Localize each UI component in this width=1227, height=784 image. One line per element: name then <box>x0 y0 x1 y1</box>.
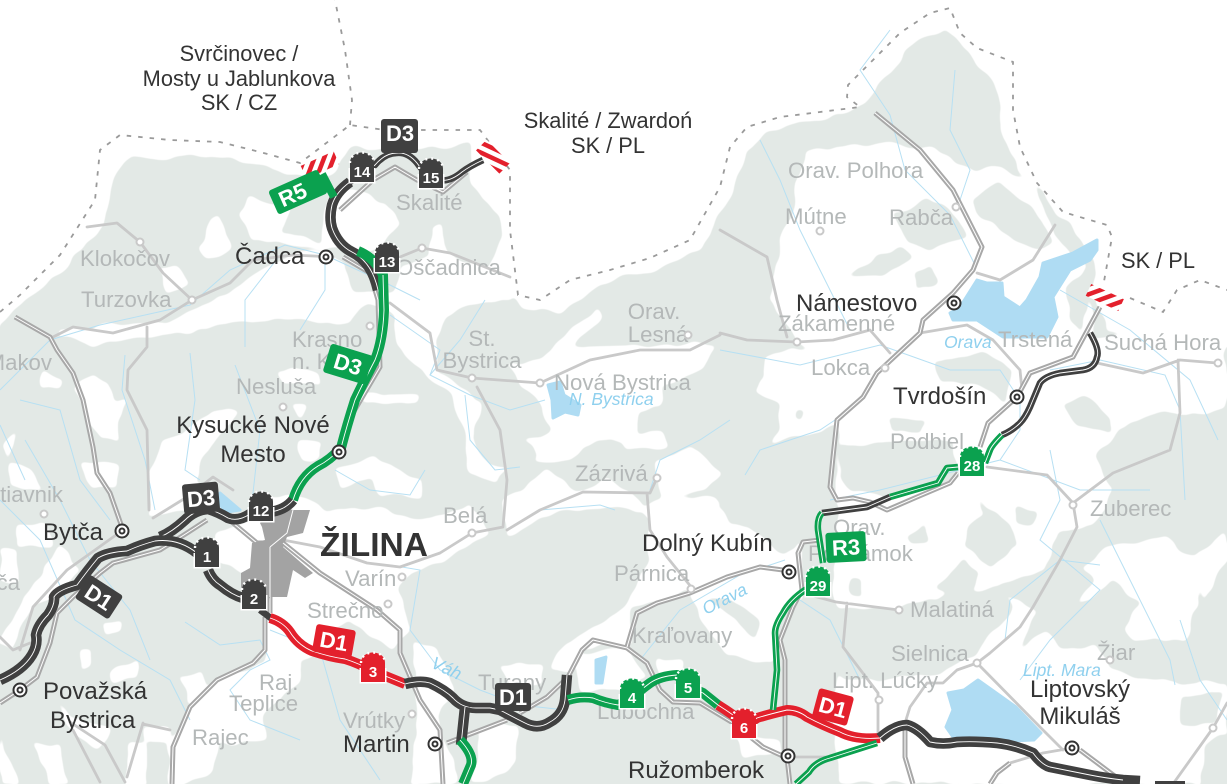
Čadca: Čadca <box>235 242 305 270</box>
Dolný Kubín: Dolný Kubín <box>642 530 773 557</box>
Kraľovany: Kraľovany <box>632 623 733 648</box>
tunnel icon 28: 28 <box>964 458 980 475</box>
Párnica: Párnica <box>614 561 690 586</box>
place names: light <box>0 158 1222 750</box>
Lipt. Mara: Lipt. Mara <box>1023 660 1101 680</box>
water names <box>428 332 1101 684</box>
city marker: Námestovo <box>948 296 960 310</box>
city area: Žilina <box>241 510 313 607</box>
Ružomberok: Ružomberok <box>628 757 765 784</box>
expressway R3 <box>773 333 1098 710</box>
road badge D3 north: D3 <box>386 121 414 146</box>
road badge D3 north <box>381 119 418 153</box>
city marker: Tvrdošín <box>1010 390 1024 404</box>
Orav. Podzámok second line: Podzámok <box>808 541 914 566</box>
St. Bystrica second line: Bystrica <box>443 348 522 373</box>
Sielnica: Sielnica <box>891 641 969 666</box>
Martin: Martin <box>343 731 410 758</box>
border crossing captions <box>143 41 1195 273</box>
road badge D3 green <box>323 343 373 385</box>
Orava river: Orava <box>699 579 751 619</box>
Nová Bystrica: Nová Bystrica <box>554 370 692 395</box>
Skalité: Skalité <box>396 190 463 215</box>
Ľubochna: Ľubochna <box>597 699 695 724</box>
tunnel icon 14: 14 <box>354 164 371 181</box>
road badge D1 Turany <box>495 683 531 711</box>
tunnel icon 1 <box>194 538 220 568</box>
motorway D1 under construction, red <box>270 618 405 684</box>
Svrčinovec: Svrčinovec / <box>180 41 299 66</box>
Mikuláš: Mikuláš <box>1039 703 1121 730</box>
Kysucké Nové Mesto: Kysucké Nové <box>176 412 330 439</box>
Liptovský Mikuláš: Liptovský <box>1030 676 1130 703</box>
motorway D1 tunnels section, green <box>568 675 718 705</box>
road badge R3 <box>825 531 867 563</box>
tunnel icon 14 <box>348 152 376 184</box>
Oščadnica: Oščadnica <box>396 255 501 280</box>
Mosty u Jablunkova: Mosty u Jablunkova <box>143 66 336 91</box>
border crossing sign Trstená <box>1086 284 1124 311</box>
tunnel icon 3 <box>360 652 386 684</box>
Tvrdošín: Tvrdošín <box>893 383 986 410</box>
Nesluša: Nesluša <box>236 374 317 399</box>
road badge R5 <box>268 169 328 215</box>
road badge D1 west <box>75 574 123 620</box>
tunnel icon 15 <box>418 158 444 190</box>
Bystrica: Bystrica <box>50 707 136 734</box>
Mútne: Mútne <box>785 204 847 229</box>
Námestovo: Námestovo <box>796 290 917 317</box>
Turzovka: Turzovka <box>81 287 172 312</box>
Žiar: Žiar <box>1097 640 1136 665</box>
Orav. Lesná second line: Lesná <box>628 322 689 347</box>
road badge R3: R3 <box>831 534 861 561</box>
tunnel icon 29: 29 <box>810 578 826 595</box>
SK / PL east: SK / PL <box>1121 248 1195 273</box>
Orava reservoir <box>950 240 1097 337</box>
north-west white patches <box>60 250 370 345</box>
state border <box>0 0 1227 312</box>
road badge D3 west: D3 <box>186 485 216 512</box>
tunnel icon 3: 3 <box>369 664 377 681</box>
Mesto: Mesto <box>220 441 286 468</box>
tunnel icon 2: 2 <box>250 591 258 608</box>
Liptovská Mara <box>946 680 1041 742</box>
tunnel icon 4 <box>618 678 646 710</box>
Zákamenné: Zákamenné <box>778 311 895 336</box>
Krasno second line: n. Kys. <box>292 349 360 374</box>
town labels <box>43 242 1130 784</box>
northern white area <box>770 142 1095 350</box>
motorway D3 to Hričov, dark <box>160 500 293 537</box>
St. Bystrica: St. <box>468 326 496 351</box>
tunnel icon 6: 6 <box>740 720 748 737</box>
Turany: Turany <box>478 670 547 695</box>
Rabča: Rabča <box>889 205 954 230</box>
Krpeľany lake <box>596 657 606 683</box>
Hričov lake <box>218 493 240 512</box>
road badge D1 west: D1 <box>80 579 117 616</box>
motorway D3 north, dark <box>330 153 483 290</box>
Klokočov: Klokočov <box>80 246 171 271</box>
tunnel icon 5: 5 <box>684 680 692 697</box>
Váh: Váh <box>428 652 465 684</box>
Skalité / Zwardoń: Skalité / Zwardoń <box>524 108 692 133</box>
road badge D1 red Strečno: D1 <box>318 627 350 656</box>
motorway D1 Martin, dark <box>405 675 567 745</box>
road badge D1 red Strečno <box>312 624 356 658</box>
SK / CZ: SK / CZ <box>201 90 277 115</box>
R-road south of Martin, green <box>460 740 472 784</box>
Podbiel: Podbiel <box>890 429 964 454</box>
Trstená: Trstená <box>998 327 1073 352</box>
Krasno n. Kys.: Krasno <box>292 327 362 352</box>
Malatiná: Malatiná <box>910 597 995 622</box>
Nová Bystrica reservoir <box>548 382 580 418</box>
eastern white area with grey patches <box>835 335 1227 784</box>
tunnel icon 5 <box>674 668 702 700</box>
SK / PL: SK / PL <box>571 133 645 158</box>
border crossing sign Skalité <box>476 140 510 174</box>
Lipt. Lúčky: Lipt. Lúčky <box>832 668 939 693</box>
Orav. Lesná: Orav. <box>628 299 680 324</box>
Orava: Orava <box>944 332 992 352</box>
tunnel icon 15: 15 <box>423 170 439 187</box>
central white patches <box>350 290 510 480</box>
Zuberec: Zuberec <box>1090 496 1171 521</box>
Bytča: Bytča <box>43 519 104 546</box>
tunnel icon 4: 4 <box>628 690 637 707</box>
city marker: Považská Bystrica <box>14 684 26 696</box>
motorway D1 Ružomberok, red <box>718 705 880 738</box>
tunnel icon 2 <box>240 580 268 610</box>
Žilina label: ŽILINA <box>320 526 428 564</box>
Vrútky: Vrútky <box>343 708 406 733</box>
Strečno: Strečno <box>307 598 383 623</box>
tunnel icon 28 <box>958 446 986 478</box>
Orav. Polhora: Orav. Polhora <box>788 158 924 183</box>
west white patches <box>73 373 128 440</box>
motorway D1 west, dark <box>0 540 272 680</box>
city marker: Liptovský Mikuláš <box>1066 742 1078 754</box>
tunnel icon 13: 13 <box>379 254 395 271</box>
border crossing sign Svrčinovec <box>301 151 339 179</box>
tunnel icon 1: 1 <box>203 549 211 566</box>
road badge R5: R5 <box>275 178 311 212</box>
Považská Bystrica: Považská <box>43 678 148 705</box>
expressway south of Ružomberok, green <box>796 743 877 784</box>
small town nodes <box>40 204 1222 732</box>
Zázrivá: Zázrivá <box>575 461 648 486</box>
expressway R5 connector <box>322 174 334 197</box>
N. Bystrica: N. Bystrica <box>569 389 654 409</box>
tunnel icon 12: 12 <box>253 503 269 520</box>
road badge D1 red Likavka: D1 <box>816 692 850 723</box>
Belá: Belá <box>443 503 488 528</box>
Raj. Teplice second line: Teplice <box>229 691 298 716</box>
Varín: Varín <box>345 566 396 591</box>
motorway D1 Liptov, dark <box>880 725 1185 784</box>
city marker: Martin <box>428 738 442 750</box>
Orav. Podzámok: Orav. <box>833 515 886 540</box>
city marker: Bytča <box>116 524 128 538</box>
tunnel icon 6 <box>730 708 758 740</box>
city marker: Ružomberok <box>782 750 794 762</box>
Rajec: Rajec <box>192 725 249 750</box>
tunnel icon 12 <box>248 492 274 522</box>
main roads <box>0 113 1120 784</box>
road badge D1 red Likavka <box>812 688 854 726</box>
city marker: Čadca <box>320 250 332 264</box>
city marker: Dolný Kubín <box>782 566 796 578</box>
Raj. Teplice: Raj. <box>259 670 298 695</box>
minor roads <box>0 223 1227 784</box>
tunnel icon 29 <box>804 566 832 598</box>
Suchá Hora: Suchá Hora <box>1104 330 1222 355</box>
road badge D3 green: D3 <box>331 348 365 381</box>
road badge D3 west <box>182 481 220 515</box>
road badge D1 Turany: D1 <box>499 685 527 710</box>
city marker: Kysucké Nové Mesto <box>332 446 346 458</box>
reservoirs and lakes <box>218 240 1097 742</box>
motorway D3 south, green <box>293 251 384 500</box>
tunnel icon 13 <box>374 242 400 274</box>
Lokca: Lokca <box>811 355 871 380</box>
